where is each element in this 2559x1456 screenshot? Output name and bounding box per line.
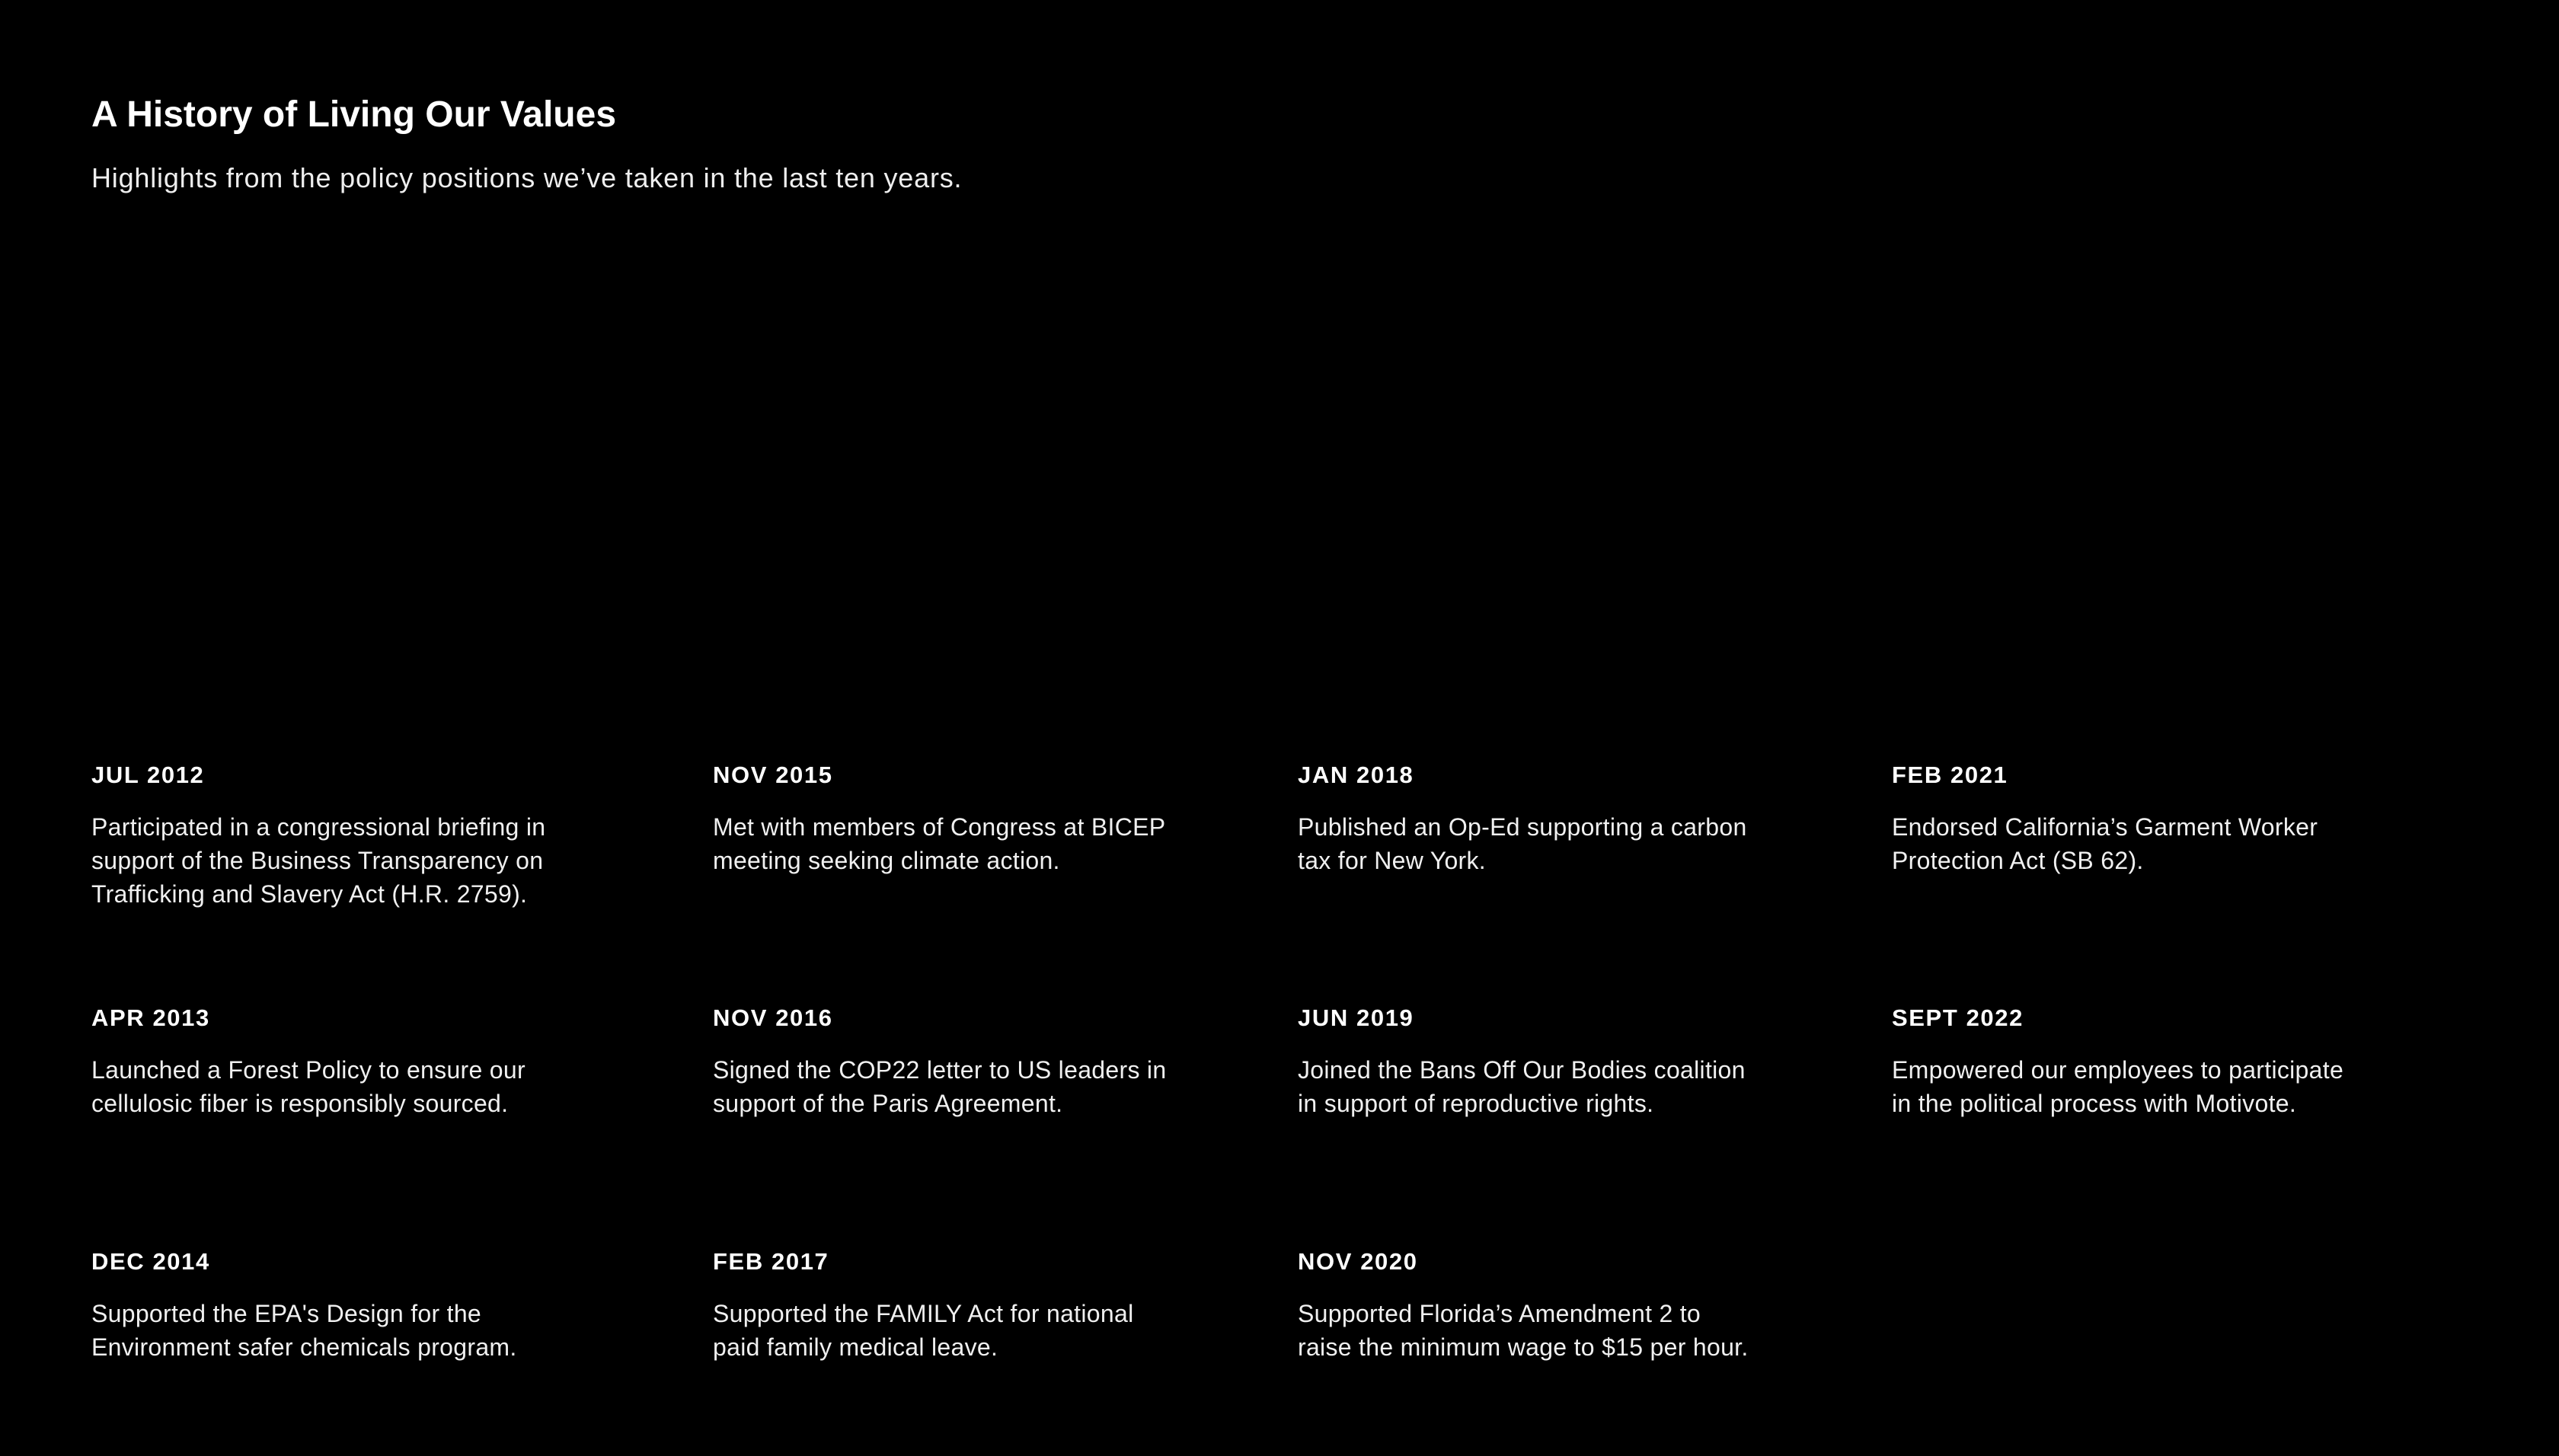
item: SEPT 2022: SEPT 2022 xyxy=(1892,1004,2024,1031)
item: JUL 2012: Participated in a congressional briefing in xyxy=(91,813,545,841)
item: NOV 2020: raise the minimum wage to $15 per hour. xyxy=(1298,1333,1749,1361)
item: FEB 2021: Protection Act (SB 62). xyxy=(1892,847,2144,874)
item: FEB 2017: FEB 2017 xyxy=(713,1248,829,1275)
item: APR 2013: APR 2013 xyxy=(91,1004,210,1031)
item: NOV 2015: NOV 2015 xyxy=(713,762,833,788)
item: APR 2013: Launched a Forest Policy to ensure our xyxy=(91,1056,526,1084)
item: APR 2013: cellulosic fiber is responsibly sourced. xyxy=(91,1090,508,1117)
item: NOV 2016: Signed the COP22 letter to US leaders in xyxy=(713,1056,1166,1084)
item: FEB 2017: Supported the FAMILY Act for national xyxy=(713,1300,1133,1327)
item: FEB 2021 xyxy=(1892,762,2318,874)
item: FEB 2017 xyxy=(713,1248,1133,1361)
item: SEPT 2022: in the political process with Motivote. xyxy=(1892,1090,2296,1117)
subtitle: Highlights from the policy positions we’ve taken in the last ten years. xyxy=(91,162,962,193)
item: APR 2013 xyxy=(91,1004,526,1117)
item: JAN 2018: Published an Op-Ed supporting a carbon xyxy=(1298,813,1747,841)
item: DEC 2014: DEC 2014 xyxy=(91,1248,210,1275)
item: FEB 2017: paid family medical leave. xyxy=(713,1333,998,1361)
item: JUN 2019: in support of reproductive rights. xyxy=(1298,1090,1653,1117)
item: JUL 2012: JUL 2012 xyxy=(91,762,204,788)
item: DEC 2014: Environment safer chemicals program. xyxy=(91,1333,517,1361)
item: JUN 2019: JUN 2019 xyxy=(1298,1004,1414,1031)
item: SEPT 2022: Empowered our employees to participate xyxy=(1892,1056,2343,1084)
item: NOV 2015: Met with members of Congress at BICEP xyxy=(713,813,1165,841)
item: JUN 2019: Joined the Bans Off Our Bodies coalition xyxy=(1298,1056,1746,1084)
item: NOV 2016 xyxy=(713,1004,1166,1117)
item: JUL 2012: Trafficking and Slavery Act (H.R. 2759). xyxy=(91,880,527,908)
item: JAN 2018: JAN 2018 xyxy=(1298,762,1414,788)
item: JUN 2019 xyxy=(1298,1004,1746,1117)
item: DEC 2014 xyxy=(91,1248,517,1361)
item: NOV 2015 xyxy=(713,762,1165,874)
title: A History of Living Our Values xyxy=(91,94,616,135)
item: NOV 2016: support of the Paris Agreement. xyxy=(713,1090,1062,1117)
item: NOV 2020: NOV 2020 xyxy=(1298,1248,1418,1275)
item: JUL 2012: support of the Business Transparency on xyxy=(91,847,543,874)
item: JUL 2012 xyxy=(91,762,545,908)
item: NOV 2016: NOV 2016 xyxy=(713,1004,833,1031)
item: FEB 2021: FEB 2021 xyxy=(1892,762,2008,788)
item: JAN 2018 xyxy=(1298,762,1747,874)
item: NOV 2020: Supported Florida’s Amendment 2 to xyxy=(1298,1300,1701,1327)
item: FEB 2021: Endorsed California’s Garment Worker xyxy=(1892,813,2318,841)
item: DEC 2014: Supported the EPA's Design for the xyxy=(91,1300,481,1327)
item: NOV 2015: meeting seeking climate action. xyxy=(713,847,1060,874)
item: JAN 2018: tax for New York. xyxy=(1298,847,1486,874)
item: SEPT 2022 xyxy=(1892,1004,2343,1117)
item: NOV 2020 xyxy=(1298,1248,1749,1361)
